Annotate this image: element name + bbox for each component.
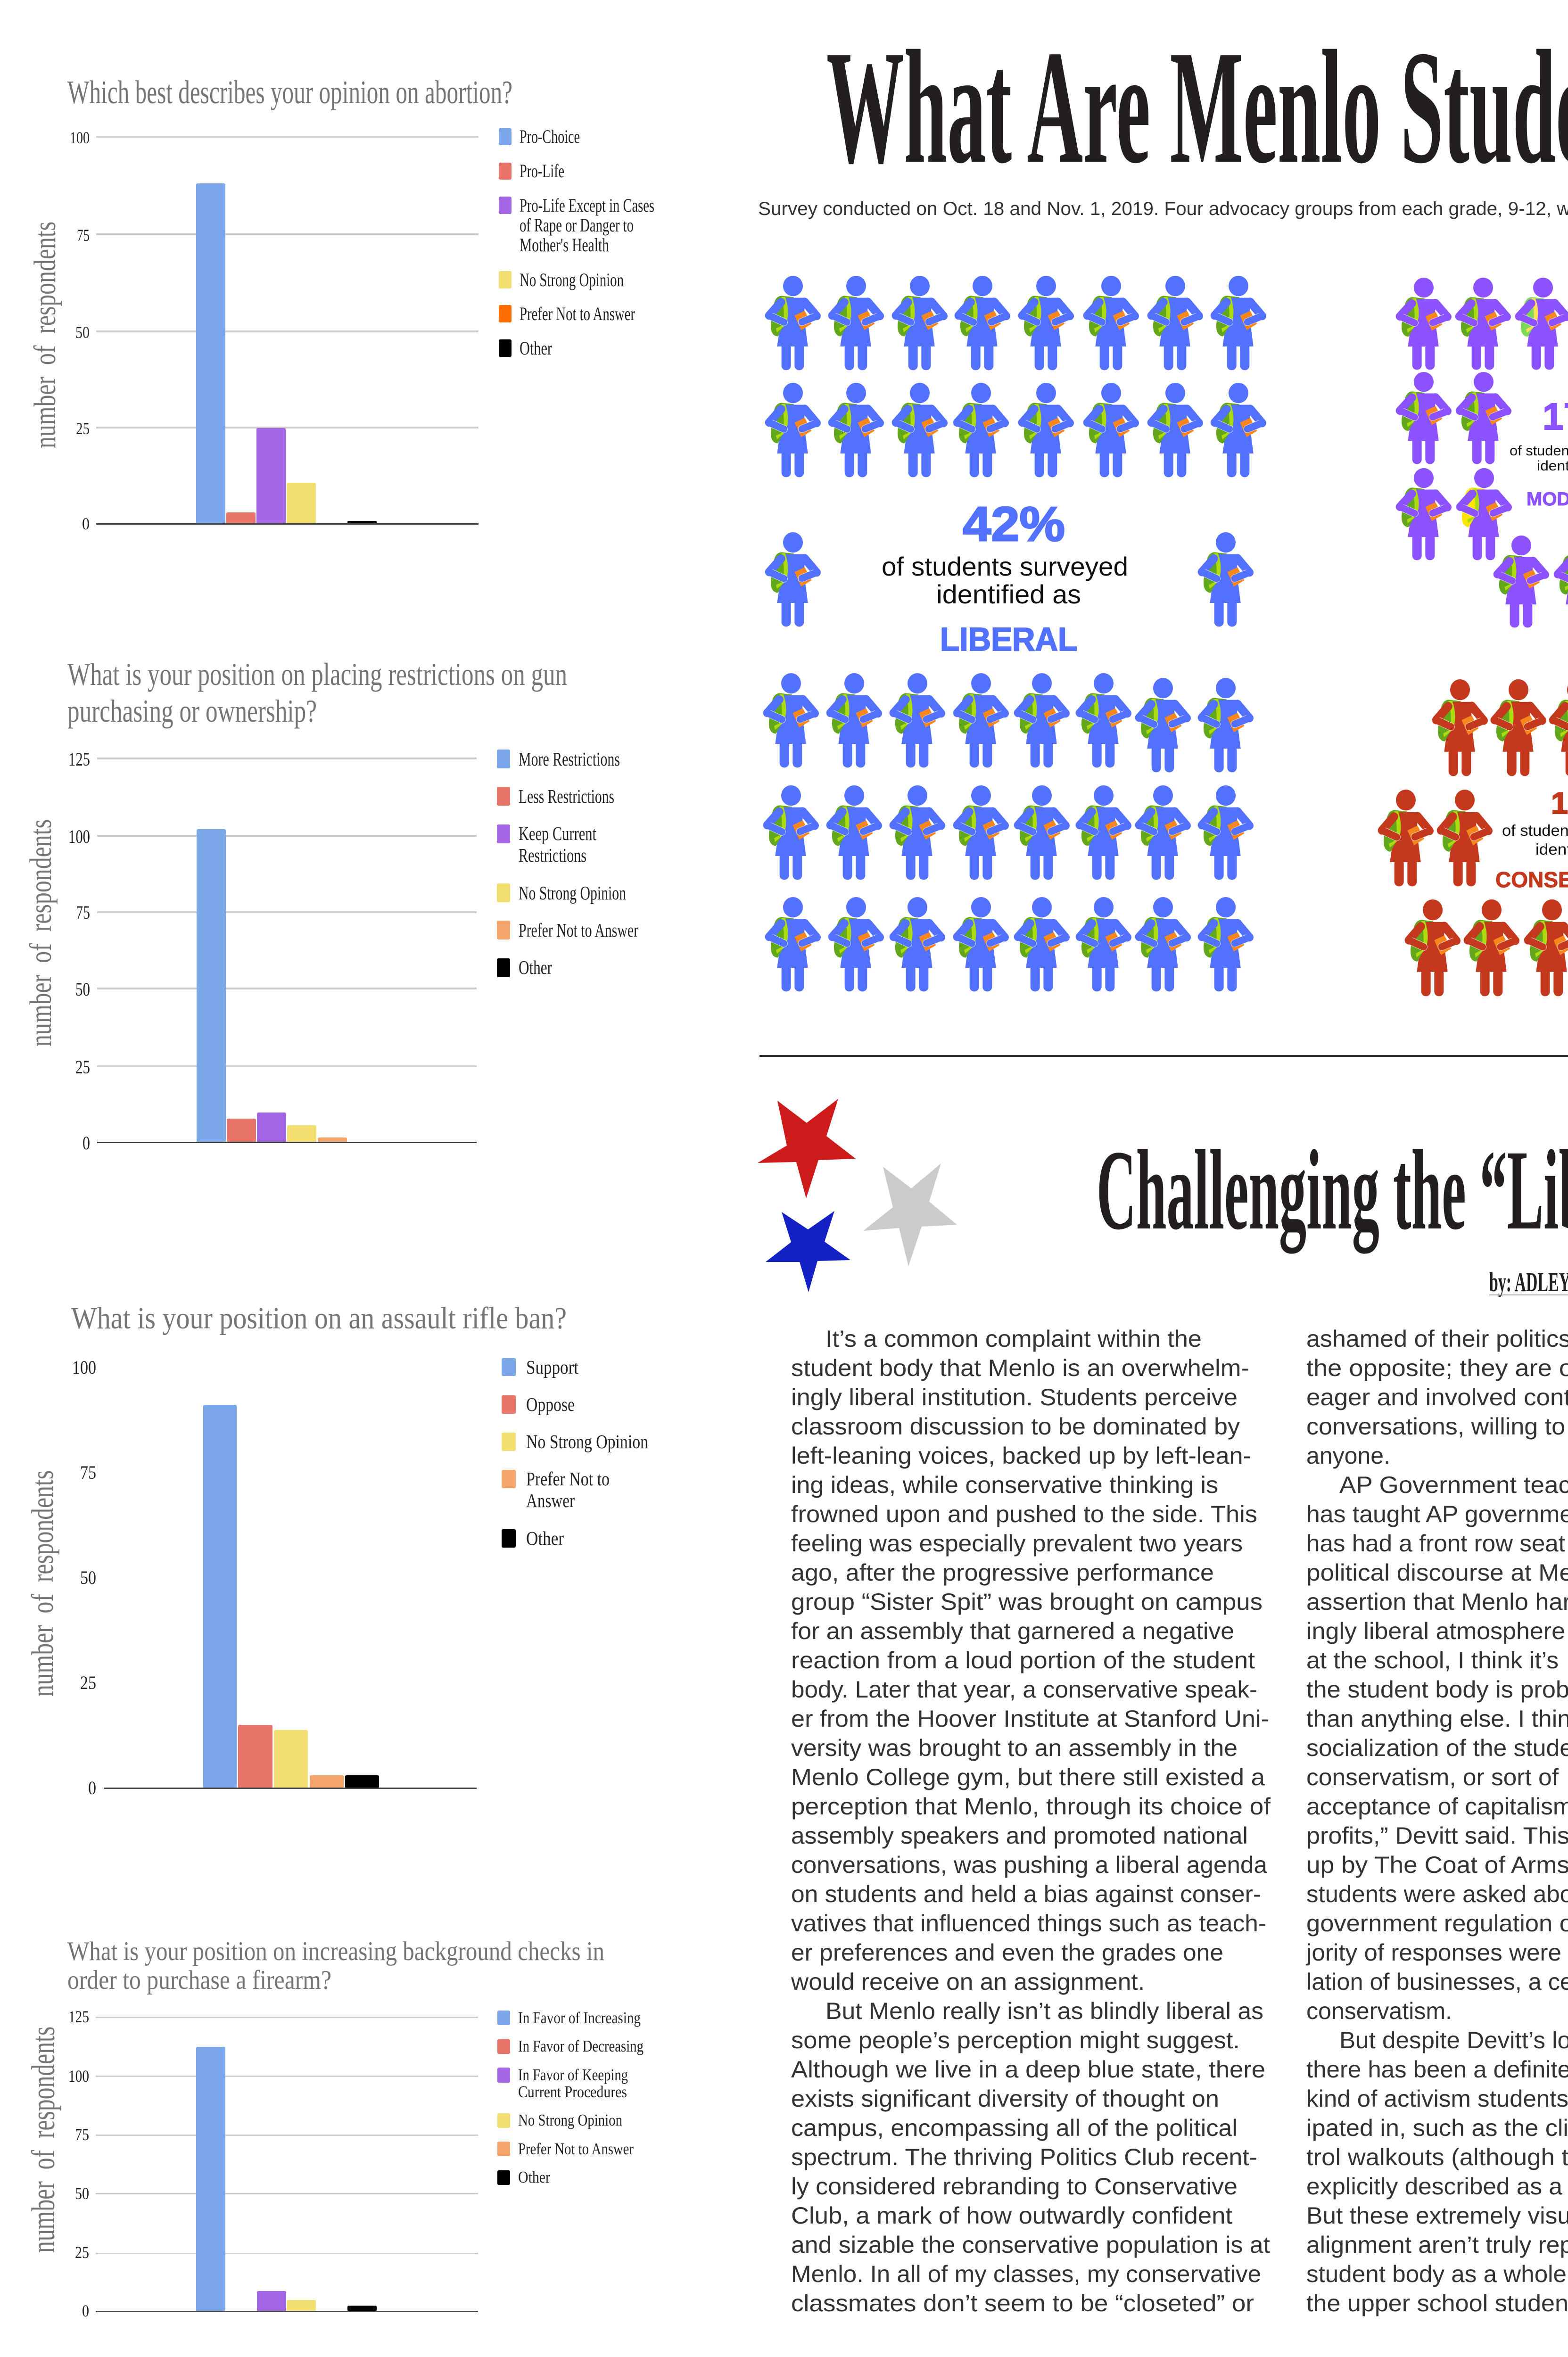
pictogram: moderate students [1400, 278, 1568, 627]
legend: In Favor of Increasing [518, 2009, 641, 2027]
chart: opinion on abortion [28, 74, 654, 533]
article text column 1: assembly speakers and promoted national [791, 1822, 1248, 1849]
article text column 1: conversations, was pushing a liberal agenda [791, 1852, 1267, 1878]
grid lines and axis [96, 136, 479, 429]
article text column 2: But these extremely visu [1306, 2202, 1568, 2229]
axis tick labels: 100 [72, 1357, 96, 1378]
article text column 1: It’s a common complaint within the [825, 1326, 1202, 1352]
bars [96, 2047, 478, 2312]
legend: No Strong Opinion [526, 1431, 648, 1452]
article text column 2: ipated in, such as the cli [1306, 2115, 1568, 2141]
legend: More Restrictions [519, 748, 620, 770]
callout: moderate [1510, 396, 1568, 510]
legend: Oppose [526, 1393, 575, 1415]
axis tick labels: 50 [75, 323, 90, 342]
axis tick labels: 75 [77, 226, 90, 245]
article text column 2: the student body is prob [1306, 1676, 1568, 1703]
legend: In Favor of Decreasing [518, 2037, 644, 2055]
article text column 2: explicitly described as a [1306, 2173, 1562, 2200]
article text column 2: has taught AP governme [1306, 1501, 1568, 1527]
y axis title: number of respondents [28, 222, 62, 448]
callout: conservative [1495, 786, 1568, 892]
article text column 2: conservatism, or sort of [1306, 1764, 1559, 1790]
chart title: Which best describes your opinion on abortion? [67, 74, 512, 111]
callout: conservative: 1 [1551, 786, 1568, 820]
axis tick labels: 0 [82, 2301, 89, 2320]
axis tick labels: 25 [80, 1672, 96, 1693]
legend: Current Procedures [518, 2083, 627, 2101]
axis tick labels: 0 [88, 1777, 96, 1798]
y axis title: number of respondents [25, 2027, 62, 2253]
article text column 1: ly considered rebranding to Conservative [791, 2173, 1238, 2200]
article text column 1: for an assembly that garnered a negative [791, 1618, 1234, 1644]
article text column 1: campus, encompassing all of the political [791, 2115, 1238, 2141]
legend [499, 126, 654, 359]
callout: 42 percent liberal: of students surveyed [882, 552, 1128, 581]
legend: Prefer Not to Answer [519, 919, 638, 941]
article text column 1: ingly liberal institution. Students perceive [791, 1384, 1238, 1410]
legend: Other [519, 956, 552, 978]
article text column 2: up by The Coat of Arms [1306, 1852, 1568, 1878]
icon: red star [758, 1099, 856, 1198]
article text column 2: conversations, willing to [1306, 1413, 1565, 1440]
article text column 2: assertion that Menlo har [1306, 1589, 1568, 1615]
grid lines [96, 2017, 478, 2254]
article text column 2 [1305, 1326, 1568, 2316]
survey note: Survey conducted on Oct. 18 and Nov. 1, 2019. Four advocacy groups from each grade, 9-12, we [758, 198, 1568, 219]
article text column 1: Menlo College gym, but there still existed a [791, 1764, 1265, 1790]
legend: No Strong Opinion [520, 269, 624, 290]
article text column 1: some people’s perception might suggest. [791, 2027, 1240, 2053]
legend: Keep Current [519, 823, 596, 844]
legend: No Strong Opinion [518, 2111, 622, 2129]
axis tick labels: 25 [75, 1056, 90, 1078]
article text column 1 [791, 1326, 1271, 2316]
chart: assault rifle ban [25, 1301, 648, 1798]
article text column 1: left-leaning voices, backed up by left-lean- [791, 1442, 1251, 1469]
article text column 2: than anything else. I thin [1306, 1706, 1568, 1732]
article text column 2: anyone. [1306, 1442, 1390, 1469]
article text column 1: body. Later that year, a conservative speak- [791, 1676, 1257, 1703]
article text column 1: group “Sister Spit” was brought on campus [791, 1589, 1263, 1615]
chart: background checks [25, 1937, 644, 2320]
legend [497, 748, 638, 978]
bars [97, 829, 477, 1143]
axis tick labels: 125 [68, 749, 90, 770]
article text column 2: at the school, I think it’s [1306, 1647, 1559, 1673]
article text column 1: would receive on an assignment. [791, 1969, 1145, 1995]
legend: Other [520, 338, 552, 359]
article text column 1: Although we live in a deep blue state, there [791, 2056, 1265, 2083]
article text column 2: alignment aren’t truly rep [1306, 2232, 1568, 2258]
article text column 1: ago, after the progressive performance [791, 1559, 1214, 1586]
legend: Other [526, 1527, 564, 1549]
bars [104, 1405, 477, 1789]
axis tick labels: 25 [75, 2243, 89, 2262]
pictogram: liberal students [767, 276, 1262, 991]
pictogram: conservative students [1382, 679, 1568, 996]
article text column 2: ingly liberal atmosphere [1306, 1618, 1565, 1644]
article text column 1: er preferences and even the grades one [791, 1939, 1223, 1966]
axis tick labels [68, 749, 90, 1154]
axis tick labels: 100 [68, 2067, 89, 2085]
article text column 1: ing ideas, while conservative thinking is [791, 1472, 1218, 1498]
article text column 2: But despite Devitt’s lo [1339, 2027, 1568, 2053]
axis tick labels: 0 [82, 514, 90, 533]
section divider [759, 1055, 1568, 1057]
legend: of Rape or Danger to [520, 214, 634, 236]
legend [497, 2009, 644, 2186]
article text column 2: lation of businesses, a ce [1306, 1969, 1568, 1995]
callout: 42 percent liberal: 42% [963, 497, 1065, 551]
legend: Support [526, 1356, 579, 1378]
legend: Other [518, 2168, 550, 2186]
article text column 1: Menlo. In all of my classes, my conservative [791, 2261, 1261, 2287]
article text column 2: trol walkouts (although t [1306, 2144, 1568, 2170]
article text column 1: feeling was especially prevalent two years [791, 1530, 1243, 1557]
article text column 2: has had a front row seat [1306, 1530, 1565, 1557]
axis tick labels: 50 [80, 1567, 96, 1588]
legend [502, 1356, 648, 1549]
chart title: purchasing or ownership? [67, 693, 317, 729]
axis tick labels: 50 [75, 979, 90, 1000]
axis tick labels: 0 [83, 1132, 90, 1154]
article text column 2: political discourse at Me [1306, 1559, 1568, 1586]
icon: blue star [766, 1211, 850, 1292]
article text column 1: classmates don’t seem to be “closeted” or [791, 2290, 1254, 2316]
article text column 1: perception that Menlo, through its choice of [791, 1793, 1271, 1820]
callout: 42 percent liberal: identified as [936, 579, 1081, 609]
axis tick labels: 100 [70, 128, 90, 147]
chart title: What is your position on placing restrictions on gun [67, 656, 567, 692]
article text column 2: government regulation o [1306, 1910, 1568, 1937]
article text column 1: reaction from a loud portion of the student [791, 1647, 1255, 1673]
axis tick labels: 100 [68, 826, 90, 847]
grid lines [97, 758, 477, 1067]
article text column 1: vatives that influenced things such as teach- [791, 1910, 1266, 1937]
article text column 1: er from the Hoover Institute at Stanford Uni- [791, 1706, 1269, 1732]
article text column 2: eager and involved cont [1306, 1384, 1568, 1410]
legend: Restrictions [519, 844, 586, 866]
axis tick labels [70, 128, 90, 533]
article text column 1: and sizable the conservative population is at [791, 2232, 1270, 2258]
axis tick labels: 125 [68, 2007, 89, 2026]
article text column 2: socialization of the stude [1306, 1735, 1568, 1761]
axis tick labels: 75 [75, 2125, 89, 2144]
axis tick labels: 25 [76, 419, 90, 438]
legend: Prefer Not to Answer [518, 2140, 634, 2158]
axis tick labels [72, 1357, 96, 1798]
article text column 2: student body as a whole [1306, 2261, 1567, 2287]
y axis title: number of respondents [25, 1470, 60, 1697]
article text column 2: there has been a definite [1306, 2056, 1568, 2083]
callout: 42 percent liberal [882, 497, 1128, 658]
legend: Prefer Not to [526, 1468, 610, 1490]
article text column 1: Club, a mark of how outwardly confident [791, 2202, 1232, 2229]
article text column 2: acceptance of capitalism [1306, 1793, 1568, 1820]
article text column 1: on students and held a bias against conser- [791, 1881, 1261, 1907]
icon: gray star [863, 1163, 957, 1266]
legend: Pro-Choice [520, 126, 580, 147]
article text column 2: students were asked abo [1306, 1881, 1568, 1907]
article text column 2: conservatism. [1306, 1998, 1452, 2024]
article text column 1: versity was brought to an assembly in the [791, 1735, 1238, 1761]
chart title: What is your position on increasing background checks in [67, 1937, 604, 1966]
axis tick labels: 75 [76, 902, 90, 923]
article text column 2: ashamed of their politics [1306, 1326, 1568, 1352]
legend: Prefer Not to Answer [520, 303, 635, 324]
article text column 2: the upper school studen [1306, 2290, 1568, 2316]
legend: Mother's Health [520, 234, 609, 255]
article text column 1: student body that Menlo is an overwhelm- [791, 1355, 1249, 1381]
legend: In Favor of Keeping [518, 2066, 628, 2084]
legend: Answer [526, 1490, 575, 1511]
axis tick labels [68, 2007, 89, 2320]
bars [96, 183, 479, 525]
article text column 1: frowned upon and pushed to the side. This [791, 1501, 1257, 1527]
article text column 2: the opposite; they are o [1306, 1355, 1568, 1381]
callout: 42 percent liberal: LIBERAL [940, 621, 1077, 658]
article text column 2: kind of activism students [1306, 2085, 1568, 2112]
axis tick labels: 50 [75, 2184, 89, 2203]
article text column 1: classroom discussion to be dominated by [791, 1413, 1240, 1440]
axis tick labels: 75 [80, 1462, 96, 1483]
article text column 2: profits,” Devitt said. This [1306, 1822, 1568, 1849]
article text column 2: AP Government teac [1339, 1472, 1568, 1498]
chart title: order to purchase a firearm? [67, 1965, 331, 1995]
legend: Less Restrictions [519, 785, 614, 807]
y axis title: number of respondents [24, 819, 58, 1047]
chart title: What is your position on an assault rifle ban? [71, 1301, 567, 1335]
legend: No Strong Opinion [519, 882, 626, 904]
article text column 1: exists significant diversity of thought on [791, 2085, 1219, 2112]
article text column 2: jority of responses were [1305, 1939, 1561, 1966]
article text column 1: spectrum. The thriving Politics Club recent- [791, 2144, 1257, 2170]
legend: Pro-Life Except in Cases [520, 195, 654, 216]
chart: restrictions on gun purchasing [24, 656, 638, 1154]
article text column 1: But Menlo really isn’t as blindly liberal as [825, 1998, 1263, 2024]
legend: Pro-Life [520, 160, 564, 181]
